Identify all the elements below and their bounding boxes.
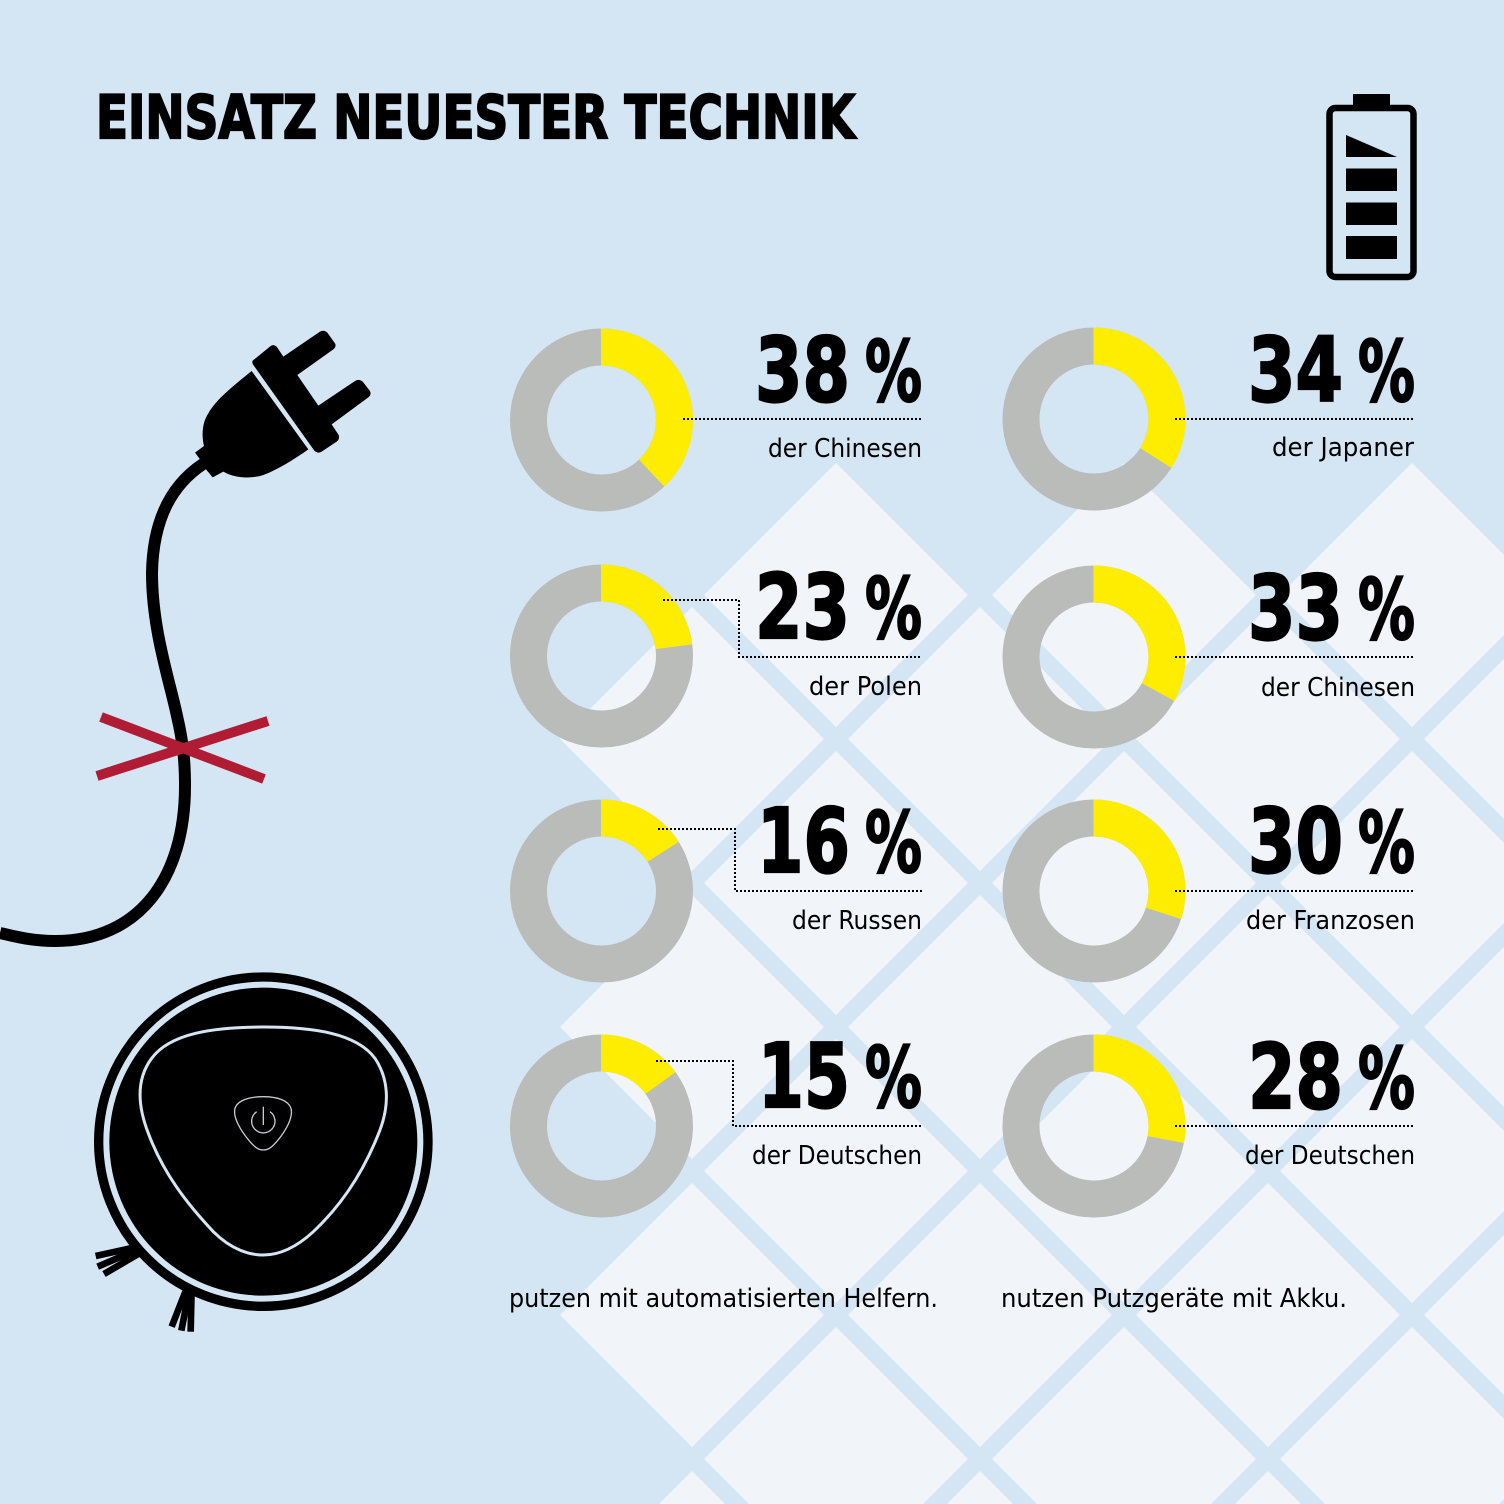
value: 38%: % bbox=[865, 323, 922, 421]
label: der Chinesen: der Chinesen bbox=[768, 434, 922, 464]
value: 30%: % bbox=[1358, 794, 1415, 892]
value: 15%: 15 bbox=[758, 1024, 850, 1128]
panel: automated helpers column bbox=[509, 318, 938, 1314]
label: der Polen: der Polen bbox=[809, 672, 922, 702]
body bbox=[109, 988, 417, 1296]
leader: 15% bbox=[656, 1061, 922, 1126]
icon: battery bbox=[1330, 94, 1414, 277]
donut: 38% bbox=[528, 347, 674, 493]
label: der Chinesen: der Chinesen bbox=[1261, 673, 1415, 703]
red cross bbox=[97, 717, 268, 779]
plug bbox=[195, 331, 371, 478]
label: der Deutschen: der Deutschen bbox=[1245, 1141, 1415, 1171]
label: der Deutschen: der Deutschen bbox=[752, 1141, 922, 1171]
panel: battery devices column bbox=[1001, 318, 1415, 1314]
title: EINSATZ NEUESTER TECHNIK bbox=[96, 83, 857, 153]
leader: 34% bbox=[1175, 418, 1415, 420]
label: der Russen: der Russen bbox=[792, 906, 922, 936]
donut: 16% bbox=[528, 818, 674, 964]
value: 33%: 33 bbox=[1248, 556, 1343, 660]
leader: 30% bbox=[1175, 890, 1415, 892]
triangular lid bbox=[140, 1027, 386, 1255]
value: 23%: 23 bbox=[755, 555, 850, 659]
donut: 30% bbox=[1021, 818, 1167, 964]
value: 30%: 30 bbox=[1248, 789, 1343, 893]
label: der Franzosen: der Franzosen bbox=[1246, 906, 1415, 936]
value: 33%: % bbox=[1358, 561, 1415, 659]
brushes bbox=[96, 1247, 192, 1332]
cord bbox=[0, 464, 203, 941]
leader: 28% bbox=[1175, 1125, 1415, 1127]
value: 28%: 28 bbox=[1248, 1025, 1343, 1129]
value: 34%: % bbox=[1358, 323, 1415, 421]
value: 28%: % bbox=[1358, 1030, 1415, 1128]
label: der Japaner: der Japaner bbox=[1272, 433, 1414, 463]
donut: 15% bbox=[528, 1053, 674, 1199]
leader: 38% bbox=[683, 418, 922, 420]
value: 38%: 38 bbox=[755, 318, 850, 422]
value: 23%: % bbox=[865, 560, 922, 658]
icon: robot vacuum bbox=[96, 977, 428, 1332]
power button bbox=[235, 1097, 291, 1150]
value: 16%: 16 bbox=[757, 789, 850, 893]
leader: 33% bbox=[1175, 656, 1415, 658]
icon: plug with crossed-out cord bbox=[0, 331, 371, 941]
caption: automated helpers: putzen mit automatisierten Helfern. bbox=[509, 1284, 938, 1314]
value: 34%: 34 bbox=[1248, 318, 1343, 422]
donut: 28% bbox=[1021, 1053, 1167, 1199]
leader: 23% bbox=[663, 600, 922, 657]
donut: 34% bbox=[1021, 346, 1167, 492]
value: 16%: % bbox=[865, 794, 922, 892]
outer ring bbox=[99, 977, 428, 1306]
leader: 16% bbox=[658, 829, 922, 891]
donut: 33% bbox=[1021, 584, 1167, 730]
caption: battery devices: nutzen Putzgeräte mit Akku. bbox=[1001, 1284, 1347, 1314]
value: 15%: % bbox=[865, 1029, 922, 1127]
donut: 23% bbox=[528, 583, 674, 729]
